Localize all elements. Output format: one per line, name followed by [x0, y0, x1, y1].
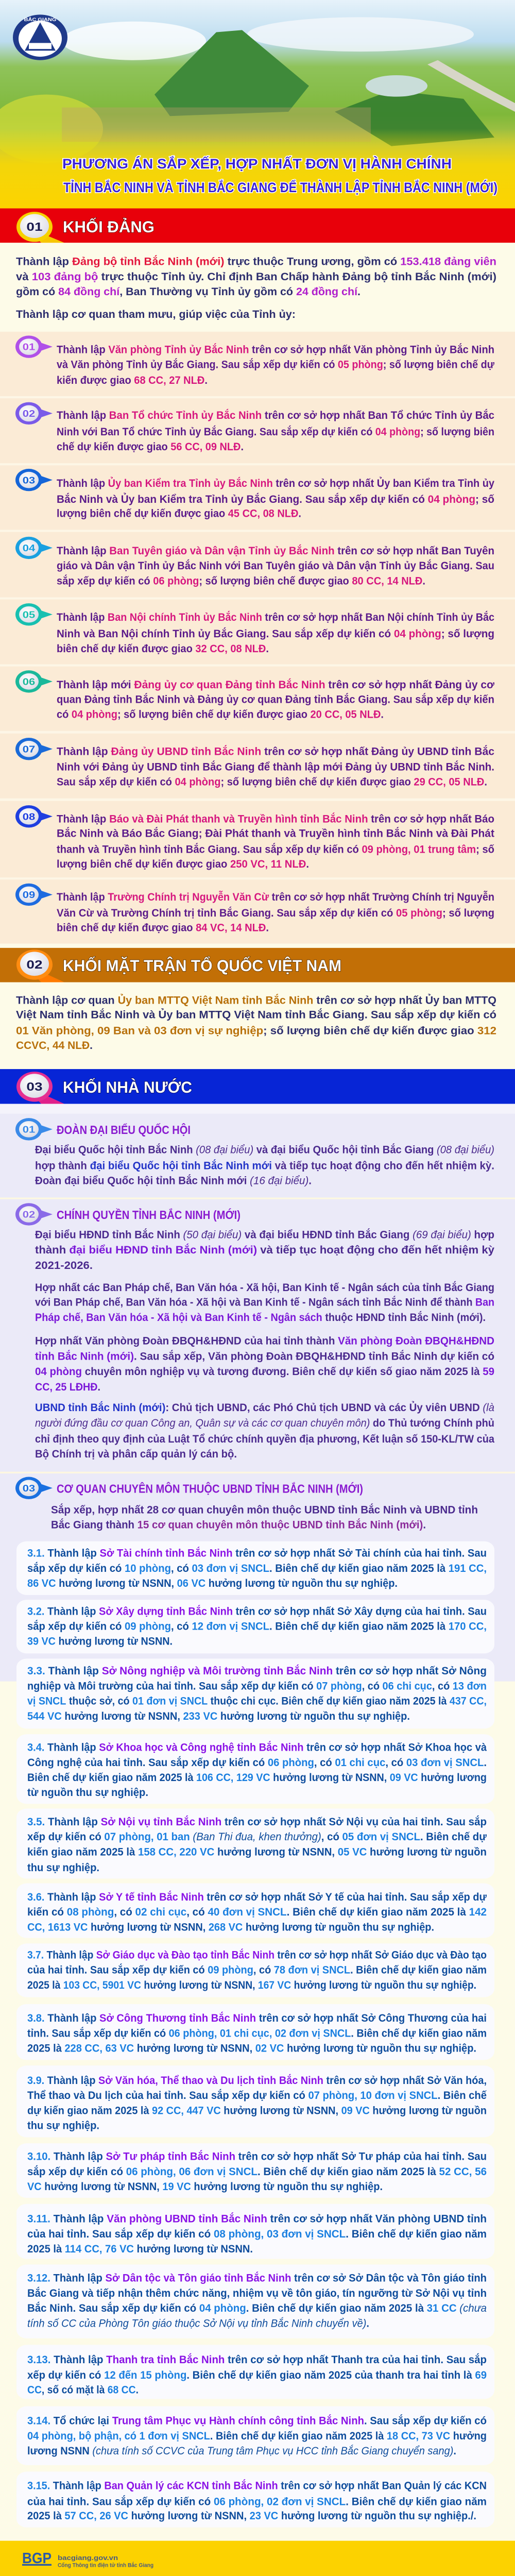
text block: MTTQ	[0, 982, 515, 1069]
card 3.9: thu sự nghiệp.	[27, 2120, 99, 2132]
footer: bacgiang.gov.vn	[58, 2554, 118, 2562]
card 3.5: thu sự nghiệp.	[27, 1861, 99, 1874]
card 3.10: sắp xếp dự kiến có 06 phòng, 06 đơn vị SNCL. Biên chế dự kiến giao năm 2025 là 52 CC, 56	[27, 2165, 487, 2178]
item 05: Ban Nội chính: 05	[23, 610, 35, 620]
item 06: Đảng ủy cơ quan Đảng: 06	[23, 677, 35, 687]
section 03 background	[0, 1104, 515, 1682]
card 3.11: của hai tỉnh. Sau sắp xếp dự kiến có 08 phòng, 03 đơn vị SNCL. Biên chế dự kiến giao năm	[27, 2227, 487, 2240]
section header 02: Khối Mặt trận	[0, 948, 515, 982]
panel: Chính quyền tỉnh Bắc Ninh (mới)	[0, 1199, 515, 1472]
card 3.9: dự kiến giao năm 2025 là 92 CC, 447 VC hưởng lương từ NSNN, 09 VC hưởng lương từ nguồn	[27, 2104, 487, 2117]
card 3.4: từ nguồn thu sự nghiệp.	[27, 1786, 148, 1799]
item 06: Đảng ủy cơ quan Đảng	[0, 667, 515, 731]
card 3.14: 04 phòng, bộ phận, có 1 đơn vị SNCL. Biên chế dự kiến giao năm 2025 là 18 CC, 73 VC hưởng	[27, 2430, 487, 2442]
card 3.5	[16, 1808, 494, 1878]
text block: MTTQ: CCVC, 44 NLĐ.	[16, 1039, 93, 1052]
card 3.4: Công nghệ của hai tỉnh. Sau sắp xếp dự kiến có 06 phòng, có 01 chi cục, có 03 đơn vị SNCL.	[27, 1756, 487, 1769]
item 09: Trường Chính trị: 09	[23, 890, 35, 901]
item 07: Đảng ủy UBND	[0, 734, 515, 799]
card 3.3: 3.3. Thành lập Sở Nông nghiệp và Môi trường tỉnh Bắc Ninh trên cơ sở hợp nhất Sở Nông	[27, 1664, 487, 1677]
card 3.13	[16, 2345, 494, 2399]
section header 01: Khối Đảng: KHỐI ĐẢNG	[63, 217, 154, 236]
card 3.1: 86 VC hưởng lương từ NSNN, 06 VC hưởng lương từ nguồn thu sự nghiệp.	[27, 1577, 398, 1590]
text block: Đảng bộ intro: Thành lập cơ quan tham mưu, giúp việc của Tỉnh ủy:	[16, 308, 296, 321]
card 3.1	[16, 1541, 494, 1595]
card 3.3: nghiệp và Môi trường của hai tỉnh. Sau sắp xếp dự kiến có 07 phòng, có 06 chi cục, có 13 đơn	[27, 1679, 487, 1692]
panel: Chính quyền tỉnh Bắc Ninh (mới): CC, 25 LĐHĐ.	[35, 1381, 100, 1393]
item 08: Báo và Đài PT-TH	[0, 801, 515, 877]
footer: Cổng Thông tin điện tử tỉnh Bắc Giang	[58, 2562, 153, 2568]
item 08: Báo và Đài PT-TH: thanh và Truyền hình tỉnh Bắc Giang. Sau sắp xếp dự kiến có 09 phòng, 01 trung tâm; số	[57, 843, 494, 856]
item 01: Văn phòng Tỉnh ủy: kiến được giao 68 CC, 27 NLĐ.	[57, 374, 208, 386]
item 03: Ủy ban Kiểm tra: lượng biên chế dự kiến được giao 45 CC, 08 NLĐ.	[57, 507, 301, 520]
card 3.11: 2025 là 114 CC, 76 VC hưởng lương từ NSNN.	[27, 2243, 253, 2255]
item 09: Trường Chính trị	[0, 879, 515, 944]
card 3.13: CC, số có mặt là 68 CC.	[27, 2384, 139, 2396]
card 3.5: kiến giao năm 2025 là 158 CC, 220 VC hưởng lương từ NSNN, 05 VC hưởng lương từ nguồn	[27, 1845, 487, 1858]
item 09: Trường Chính trị: Văn Cừ và Trường Chính trị tỉnh Bắc Giang. Sau sắp xếp dự kiến có 05 phòng; số lượng	[57, 906, 494, 919]
panel: Chính quyền tỉnh Bắc Ninh (mới): CHÍNH QUYỀN TỈNH BẮC NINH (MỚI)	[57, 1208, 241, 1222]
card 3.2: 39 VC hưởng lương từ NSNN.	[27, 1635, 173, 1648]
item 08: Báo và Đài PT-TH: 08	[23, 812, 35, 822]
title: PHƯƠNG ÁN SẮP XẾP, HỢP NHẤT ĐƠN VỊ HÀNH CHÍNH	[62, 156, 452, 172]
section header 01: Khối Đảng: 01	[26, 221, 43, 233]
section header 03: Khối Nhà nước: 03	[26, 1080, 43, 1093]
card 3.1: sắp xếp dự kiến có 10 phòng, có 03 đơn vị SNCL. Biên chế dự kiến giao năm 2025 là 191 CC,	[27, 1562, 487, 1574]
section header 02: Khối Mặt trận: KHỐI MẶT TRẬN TỔ QUỐC VIỆT NAM	[63, 956, 341, 975]
item 07: Đảng ủy UBND: Sau sắp xếp dự kiến có 04 phòng; số lượng biên chế dự kiến được giao 29 CC, 05 NLĐ.	[57, 775, 487, 788]
card 3.3	[16, 1658, 494, 1728]
card 3.4: Biên chế dự kiến giao năm 2025 là 106 CC, 129 VC hưởng lương từ NSNN, 09 VC hưởng lương	[27, 1771, 487, 1784]
item 08: Báo và Đài PT-TH: lượng biên chế dự kiến được giao 250 VC, 11 NLĐ.	[57, 858, 309, 870]
card 3.6: kiến có 08 phòng, có 02 chi cục, có 40 đơn vị SNCL. Biên chế dự kiến giao năm 2025 là 142	[27, 1906, 487, 1919]
item 02: Ban Tổ chức	[0, 398, 515, 463]
panel: Đoàn đại biểu Quốc hội: Đoàn đại biểu Quốc hội tỉnh Bắc Ninh mới (16 đại biểu).	[35, 1174, 312, 1187]
item 05: Ban Nội chính: biên chế dự kiến được giao 32 CC, 08 NLĐ.	[57, 642, 269, 655]
item 07: Đảng ủy UBND: 07	[23, 744, 35, 755]
item 04: Ban Tuyên giáo và Dân vận: sắp xếp dự kiến có 06 phòng; số lượng biên chế được giao 80 CC, 14 NLĐ.	[57, 574, 425, 587]
card 3.12: tính số CC của Phòng Tôn giáo thuộc Sở Nội vụ tỉnh Bắc Ninh chuyển về).	[27, 2317, 369, 2330]
footer	[0, 2541, 515, 2576]
section header 03: Khối Nhà nước: KHỐI NHÀ NƯỚC	[63, 1078, 192, 1096]
item 02: Ban Tổ chức: chế dự kiến được giao 56 CC, 09 NLĐ.	[57, 440, 244, 453]
card 3.12	[16, 2264, 494, 2338]
card 3.5: xếp dự kiến có 07 phòng, 01 ban (Ban Thi đua, khen thưởng), có 05 đơn vị SNCL. Biên chế dự	[27, 1831, 487, 1843]
logo: Bắc Giang emblem: BẮC GIANG	[24, 16, 57, 23]
item 03: Ủy ban Kiểm tra	[0, 465, 515, 530]
text block: Đảng bộ intro: Thành lập Đảng bộ tỉnh Bắc Ninh (mới) trực thuộc Trung ương, gồm có 153.418 đảng viên	[16, 255, 496, 268]
item 09: Trường Chính trị: biên chế dự kiến được giao 84 VC, 14 NLĐ.	[57, 921, 269, 934]
item 01: Văn phòng Tỉnh ủy: 01	[23, 342, 35, 352]
panel: Đoàn đại biểu Quốc hội	[0, 1114, 515, 1197]
item 08: Báo và Đài PT-TH: Thành lập Báo và Đài Phát thanh và Truyền hình tỉnh Bắc Ninh trên cơ sở hợp nhất Báo	[57, 812, 494, 825]
section header 03: Khối Nhà nước	[0, 1069, 515, 1104]
card 3.2	[16, 1600, 494, 1653]
card 3.2: sắp xếp dự kiến có 09 phòng, có 12 đơn vị SNCL. Biên chế dự kiến giao năm 2025 là 170 CC,	[27, 1620, 487, 1633]
card 3.15	[16, 2471, 494, 2528]
card 3.9: Thể thao và Du lịch của hai tỉnh. Sau sắp xếp dự kiến có 07 phòng, 10 đơn vị SNCL. Biên chế	[27, 2089, 487, 2102]
item list background	[0, 332, 515, 944]
text block: MTTQ: 01 Văn phòng, 09 Ban và 03 đơn vị sự nghiệp; số lượng biên chế dự kiến được giao 312	[16, 1024, 496, 1037]
panel: Chính quyền tỉnh Bắc Ninh (mới): 02	[23, 1210, 35, 1220]
item 01: Văn phòng Tỉnh ủy	[0, 332, 515, 396]
card 3.7	[16, 1943, 494, 1997]
panel: Cơ quan chuyên môn thuộc UBND: Bắc Giang thành 15 cơ quan chuyên môn thuộc UBND tỉnh Bắc Ninh (mới).	[51, 1518, 426, 1531]
card 3.8	[16, 2004, 494, 2060]
panel: Cơ quan chuyên môn thuộc UBND	[15, 1477, 478, 1531]
title	[62, 156, 497, 195]
item 05: Ban Nội chính: Ninh và Ban Nội chính Tỉnh ủy Bắc Giang. Sau sắp xếp dự kiến có 04 phòng; số lượng	[57, 627, 494, 640]
text block: Đảng bộ intro: gồm có 84 đồng chí, Ban Thường vụ Tỉnh ủy gồm có 24 đồng chí.	[16, 285, 360, 298]
text block: Đảng bộ intro	[0, 243, 515, 332]
item 05: Ban Nội chính	[0, 599, 515, 664]
panel: Đoàn đại biểu Quốc hội: Đại biểu Quốc hội tỉnh Bắc Ninh (08 đại biểu) và đại biểu Quốc hội tỉnh Bắc Giang (08 đại biểu)	[35, 1143, 494, 1156]
item 04: Ban Tuyên giáo và Dân vận: 04	[23, 544, 36, 554]
panel: Cơ quan chuyên môn thuộc UBND: 03	[23, 1484, 35, 1494]
item 02: Ban Tổ chức: Ninh với Ban Tổ chức Tỉnh ủy Bắc Giang. Sau sắp xếp dự kiến có 04 phòng; số lượng biên	[57, 425, 494, 438]
logo: BGP: BGP	[22, 2550, 52, 2566]
hero banner	[0, 0, 515, 209]
panel: Cơ quan chuyên môn thuộc UBND: CƠ QUAN CHUYÊN MÔN THUỘC UBND TỈNH BẮC NINH (MỚI)	[57, 1482, 363, 1496]
card 3.11	[16, 2204, 494, 2259]
panel: Đoàn đại biểu Quốc hội: ĐOÀN ĐẠI BIỂU QUỐC HỘI	[57, 1123, 191, 1137]
item 03: Ủy ban Kiểm tra: Bắc Ninh và Ủy ban Kiểm tra Tỉnh ủy Bắc Giang. Sau sắp xếp dự kiến có 04 phòng; số	[57, 492, 494, 505]
panel: Đoàn đại biểu Quốc hội: 01	[23, 1125, 35, 1135]
item 02: Ban Tổ chức: 02	[23, 409, 35, 419]
card 3.9	[16, 2065, 494, 2137]
card 3.15: của hai tỉnh. Sau sắp xếp dự kiến có 06 phòng, 02 đơn vị SNCL. Biên chế dự kiến giao năm	[27, 2495, 487, 2508]
card 3.12: Bắc Ninh. Sau sắp xếp dự kiến có 04 phòng. Biên chế dự kiến giao năm 2025 là 31 CC (chưa	[27, 2301, 487, 2315]
panel: Chính quyền tỉnh Bắc Ninh (mới): Bộ Chính trị và phân cấp quản lý cán bộ.	[35, 1448, 237, 1460]
item 04: Ban Tuyên giáo và Dân vận	[0, 532, 515, 597]
card 3.4	[16, 1734, 494, 1804]
logo: Bắc Giang emblem	[13, 14, 67, 60]
card 3.3: vị SNCL thuộc sở, có 01 đơn vị SNCL thuộc chi cục. Biên chế dự kiến giao năm 2025 là 437 CC,	[27, 1695, 487, 1707]
panel: Chính quyền tỉnh Bắc Ninh (mới): Đại biểu HĐND tỉnh Bắc Ninh (50 đại biểu) và đại biểu HĐND tỉnh Bắc Giang (69 đại biểu) hợp	[35, 1228, 494, 1241]
card 3.6	[16, 1884, 494, 1938]
panel: Chính quyền tỉnh Bắc Ninh (mới): 2021-2026.	[35, 1259, 93, 1272]
card 3.10: VC hưởng lương từ NSNN, 19 VC hưởng lương từ nguồn thu sự nghiệp.	[27, 2180, 383, 2193]
section header 01: Khối Đảng	[0, 209, 515, 243]
card 3.14	[16, 2406, 494, 2465]
item 03: Ủy ban Kiểm tra: 03	[23, 476, 35, 486]
card 3.8: tỉnh. Sau sắp xếp dự kiến có 06 phòng, 01 chi cục, 02 đơn vị SNCL. Biên chế dự kiến giao năm	[27, 2026, 487, 2040]
card 3.3: 544 VC hưởng lương từ NSNN, 233 VC hưởng lương từ nguồn thu sự nghiệp.	[27, 1710, 410, 1722]
card 3.14: 3.14. Tổ chức lại Trung tâm Phục vụ Hành chính công tỉnh Bắc Ninh. Sau sắp xếp dự kiến có	[27, 2414, 487, 2427]
section header 02: Khối Mặt trận: 02	[26, 958, 43, 971]
item 06: Đảng ủy cơ quan Đảng: có 04 phòng; số lượng biên chế dự kiến được giao 20 CC, 05 NLĐ.	[57, 708, 384, 721]
card 3.7: của hai tỉnh. Sau sắp xếp dự kiến có 09 phòng, có 78 đơn vị SNCL. Biên chế dự kiến giao năm	[27, 1963, 487, 1976]
card 3.10	[16, 2143, 494, 2198]
card 3.6: CC, 1613 VC hưởng lương từ NSNN, 268 VC hưởng lương từ nguồn thu sự nghiệp.	[27, 1921, 434, 1934]
